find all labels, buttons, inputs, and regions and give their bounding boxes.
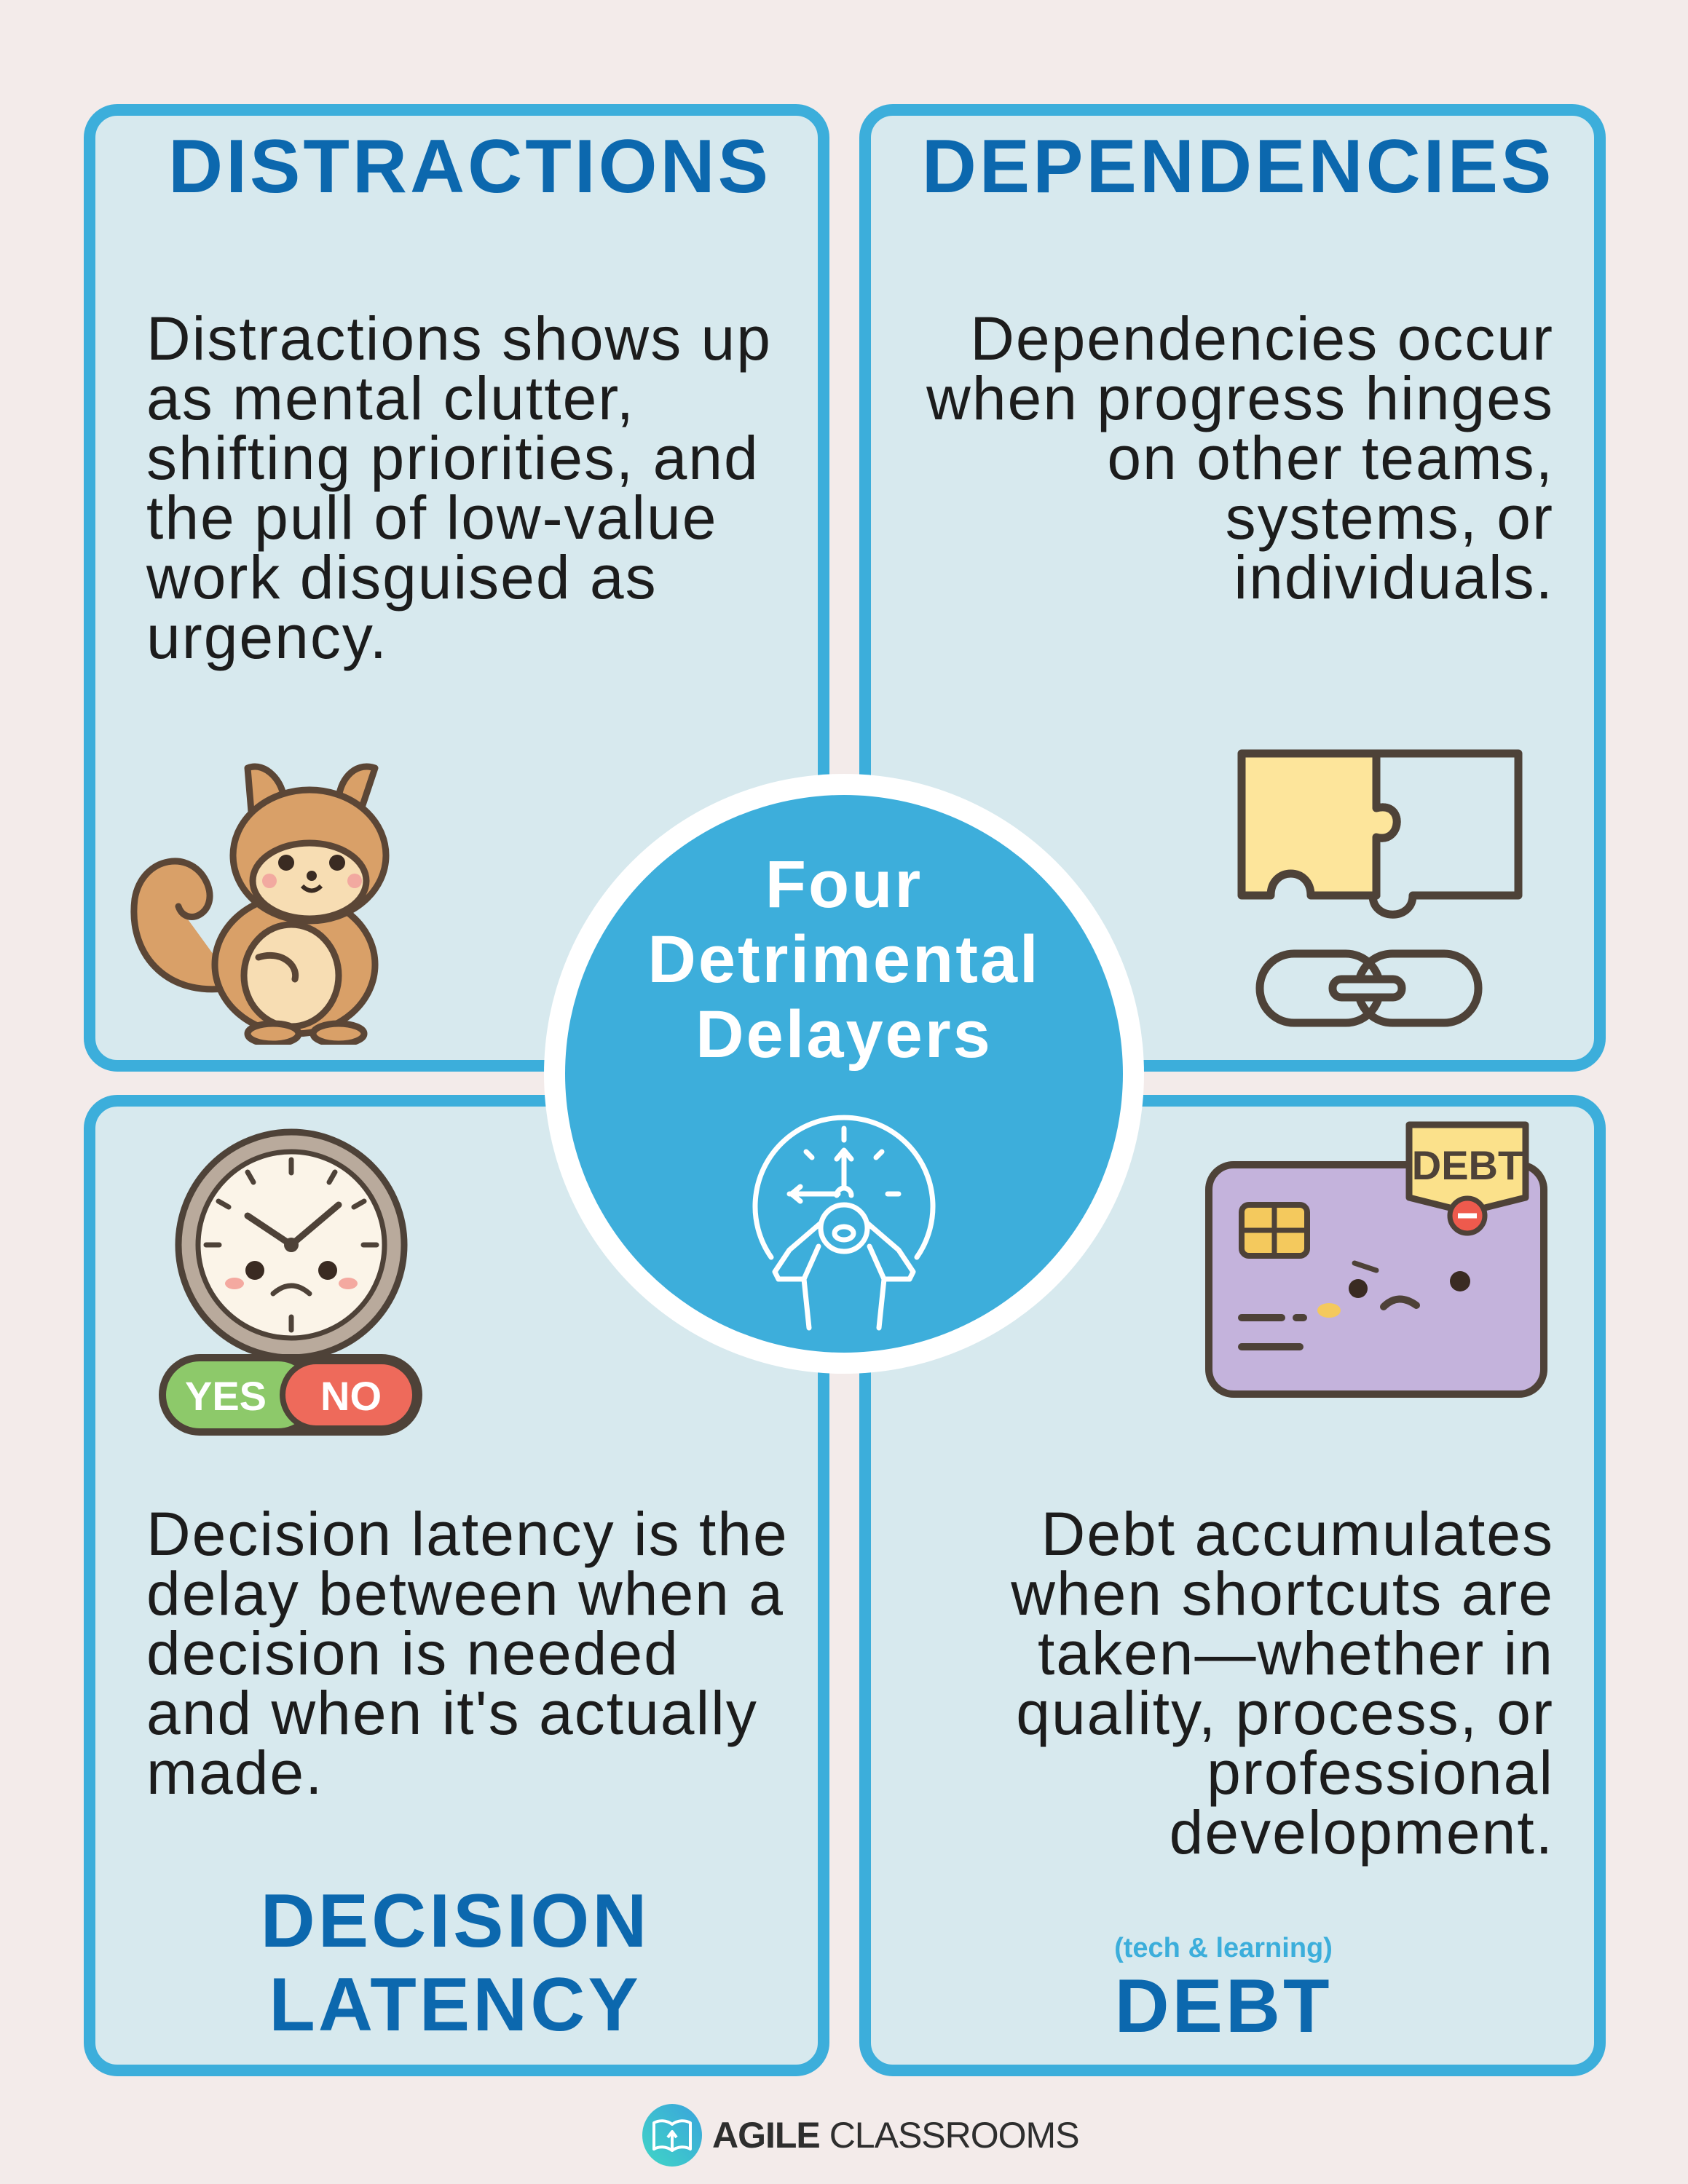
text: dependencies: individuals. (1234, 543, 1554, 612)
heading: decision latency: DECISION (261, 1879, 650, 1963)
footer logo (642, 2104, 1079, 2167)
text: decision latency: made. (146, 1738, 323, 1807)
heading: distractions: DISTRACTIONS (168, 124, 771, 209)
text: debt: when shortcuts are (1011, 1559, 1554, 1628)
text: dependencies (926, 304, 1554, 612)
text: agile classrooms: AGILE CLASSROOMS (712, 2115, 1079, 2156)
icon: person under clock (753, 1115, 935, 1331)
text: distractions: urgency. (146, 603, 388, 671)
panel: dependencies (859, 104, 1606, 1072)
heading: dependencies: DEPENDENCIES (922, 124, 1554, 209)
text: dependencies: when progress hinges (926, 364, 1554, 432)
text: debt: taken—whether in (1038, 1619, 1554, 1688)
icon: squirrel (130, 763, 389, 1045)
icon: sad debt card (1205, 1121, 1547, 1398)
center circle: four detrimental delayers (544, 774, 1144, 1374)
icon: clock with yes/no toggle: NO (320, 1373, 382, 1419)
text: decision latency: decision is needed (146, 1619, 679, 1688)
text: distractions: as mental clutter, (146, 364, 635, 432)
icon: sad debt card: DEBT (1412, 1142, 1523, 1188)
text: dependencies: on other teams, (1107, 424, 1554, 492)
text: debt: quality, process, or (1016, 1679, 1554, 1747)
panel: debt (859, 1095, 1606, 2076)
icon: clock with yes/no toggle (159, 1128, 422, 1436)
text: distractions (146, 304, 772, 671)
text: decision latency: delay between when a (146, 1559, 784, 1628)
icon: book logo (642, 2104, 702, 2167)
panel: distractions (84, 104, 829, 1072)
text: debt: Debt accumulates (1041, 1500, 1554, 1568)
text: dependencies: Dependencies occur (970, 304, 1554, 373)
heading: decision latency: LATENCY (269, 1963, 642, 2047)
title: Detrimental (647, 922, 1041, 997)
text: debt (1011, 1500, 1554, 1867)
title (647, 847, 1041, 1072)
text: distractions: the pull of low-value (146, 483, 717, 552)
text: debt: development. (1170, 1798, 1554, 1867)
icon: clock with yes/no toggle: YES (185, 1373, 267, 1419)
icon: puzzle and chain (1238, 750, 1522, 1026)
text: distractions: Distractions shows up (146, 304, 772, 373)
heading: decision latency (261, 1879, 650, 2047)
title: Four (765, 847, 923, 922)
heading: debt: DEBT (1114, 1964, 1333, 2049)
subheading: tech & learning: (tech & learning) (1114, 1933, 1333, 1963)
text: distractions: work disguised as (146, 543, 658, 612)
text: dependencies: systems, or (1226, 483, 1554, 552)
title: Delayers (695, 997, 993, 1072)
text: decision latency: Decision latency is the (146, 1500, 789, 1568)
text: decision latency: and when it's actually (146, 1679, 758, 1747)
text: distractions: shifting priorities, and (146, 424, 760, 492)
panel: decision latency (84, 1095, 829, 2076)
text: decision latency (146, 1500, 789, 1807)
text: debt: professional (1207, 1738, 1554, 1807)
